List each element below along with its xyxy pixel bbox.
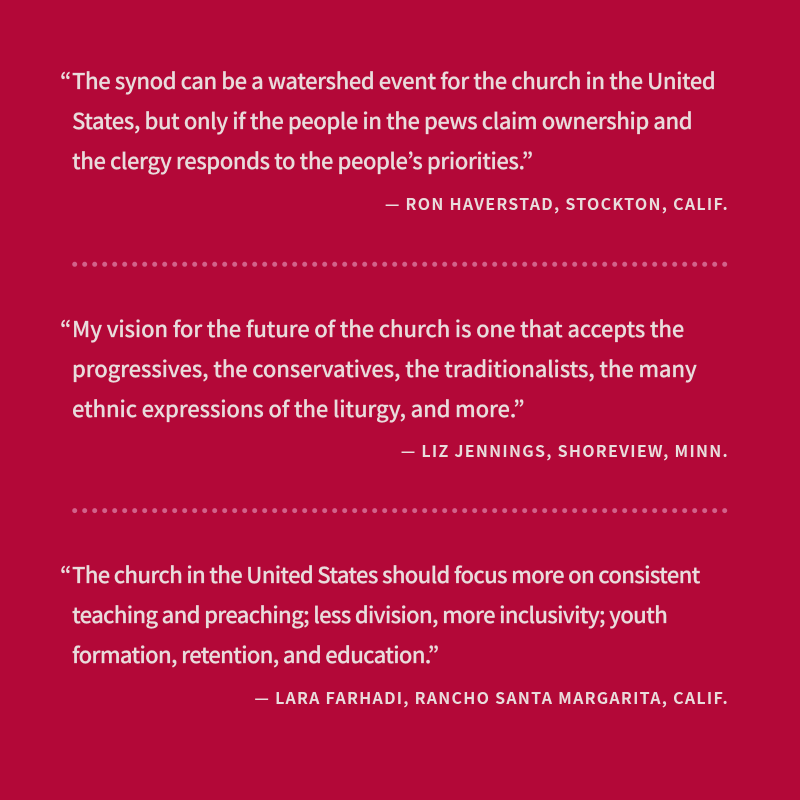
- panel: quote 2: [60, 312, 729, 462]
- quote text 1: [72, 64, 715, 176]
- divider: dotted line 1: [72, 262, 728, 267]
- quote mark 2: “: [60, 312, 71, 344]
- quote text 2: ethnic expressions of the liturgy, and more.”: [72, 392, 524, 424]
- quote text 1: the clergy responds to the people’s priorities.”: [72, 144, 533, 176]
- quote text 3: The church in the United States should focus more on consistent: [72, 558, 700, 590]
- quote text 2: progressives, the conservatives, the traditionalists, the many: [72, 352, 697, 384]
- attribution 2: — LIZ JENNINGS, SHOREVIEW, MINN.: [401, 438, 729, 462]
- quote text 1: The synod can be a watershed event for the church in the United: [72, 64, 715, 96]
- quote text 2: [72, 312, 697, 424]
- attribution 1: — RON HAVERSTAD, STOCKTON, CALIF.: [385, 191, 729, 215]
- panel: quote 1: [60, 64, 729, 215]
- quote text 3: [72, 558, 700, 670]
- quote text 3: teaching and preaching; less division, more inclusivity; youth: [72, 598, 667, 630]
- panel: quote 3: [60, 558, 729, 709]
- quote mark 1: “: [60, 64, 71, 96]
- attribution 3: — LARA FARHADI, RANCHO SANTA MARGARITA, CALIF.: [254, 685, 729, 709]
- quote text 2: My vision for the future of the church is one that accepts the: [72, 312, 684, 344]
- divider: dotted line 2: [72, 508, 728, 514]
- quote text 1: States, but only if the people in the pews claim ownership and: [72, 104, 692, 136]
- quote mark 3: “: [60, 558, 71, 590]
- quote text 3: formation, retention, and education.”: [72, 638, 438, 670]
